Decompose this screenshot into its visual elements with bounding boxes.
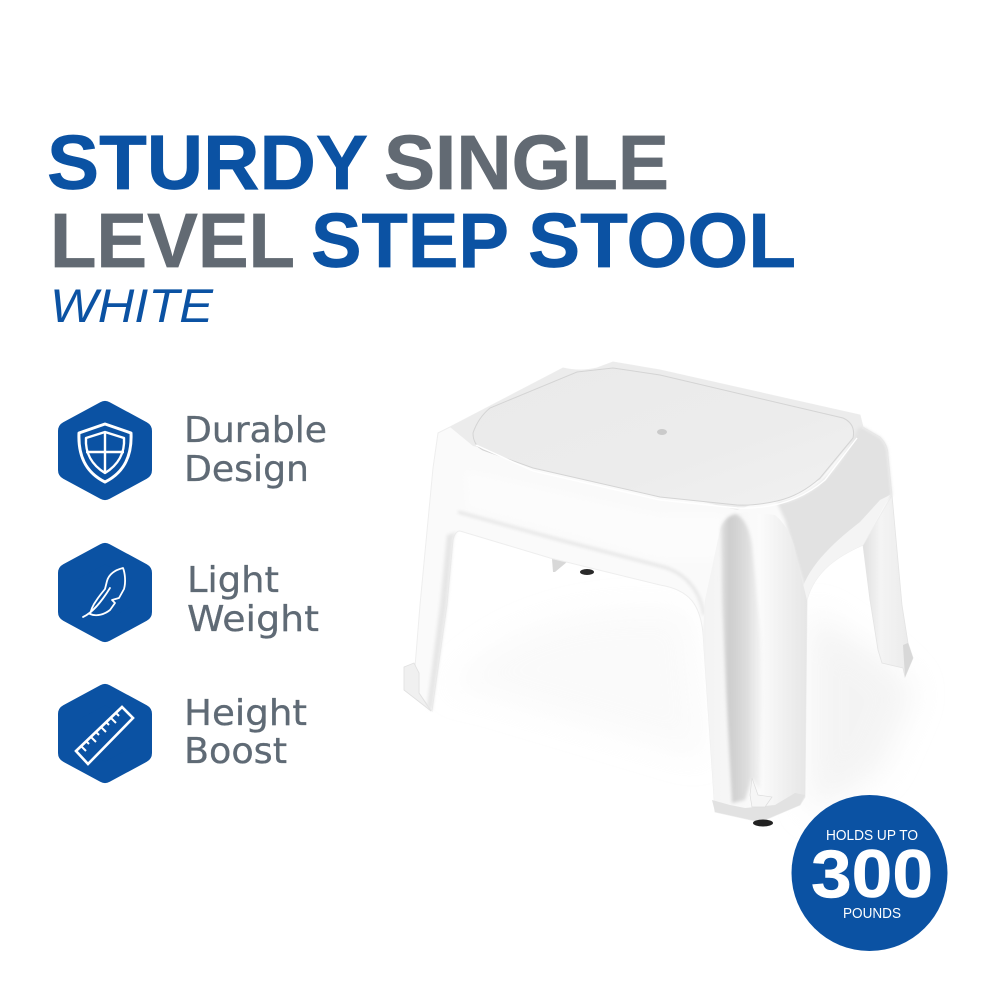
front foot lip	[712, 793, 805, 822]
feature: height boost	[68, 693, 307, 773]
title: STURDY	[47, 120, 368, 206]
left foot	[404, 663, 431, 711]
badge: holds up to 300 pounds: POUNDS	[843, 905, 901, 922]
seat center dimple	[657, 429, 667, 435]
icon: shield	[68, 411, 142, 490]
feature: durable design	[68, 410, 327, 490]
icon: ruler	[68, 694, 142, 773]
front foot pad	[753, 820, 773, 826]
badge: holds up to 300 pounds: HOLDS UP TO	[826, 827, 918, 844]
label: light weight	[187, 560, 319, 640]
feature: light weight	[68, 553, 319, 640]
label: height boost	[184, 693, 307, 772]
subtitle: white: WHITE	[50, 279, 214, 332]
front leg body	[703, 512, 807, 822]
product: white step stool	[404, 362, 915, 826]
stool body	[415, 362, 892, 822]
rear leg foot	[903, 643, 913, 677]
badge: holds up to 300 pounds	[792, 795, 948, 951]
front corner shading	[721, 514, 762, 803]
title: SINGLE	[384, 120, 669, 206]
rear right leg	[863, 495, 913, 677]
front foot nub	[750, 778, 772, 807]
icon: feather	[68, 553, 142, 632]
title: LEVEL	[50, 198, 295, 284]
left leg inner edge	[427, 531, 460, 711]
label: light weight: Weight	[187, 599, 319, 640]
back foot pad	[580, 569, 594, 575]
badge: holds up to 300 pounds: 300	[811, 836, 933, 912]
label: height boost: Height	[184, 693, 307, 734]
label: durable design: Design	[184, 449, 309, 490]
title: STOOL	[528, 198, 796, 284]
label: height boost: Boost	[184, 731, 287, 772]
label: durable design	[184, 410, 327, 490]
label: light weight: Light	[187, 560, 279, 601]
seat surround	[450, 362, 863, 510]
front apron rib	[458, 512, 704, 615]
right side band	[777, 427, 892, 590]
right apron rib	[800, 495, 890, 600]
seat plate	[473, 368, 854, 505]
floor shadow	[445, 608, 915, 815]
title	[47, 120, 796, 284]
back leg	[552, 559, 567, 572]
label: durable design: Durable	[184, 410, 327, 451]
seat rim highlight	[476, 438, 857, 508]
front band highlight	[465, 470, 725, 560]
title: STEP	[311, 198, 509, 284]
